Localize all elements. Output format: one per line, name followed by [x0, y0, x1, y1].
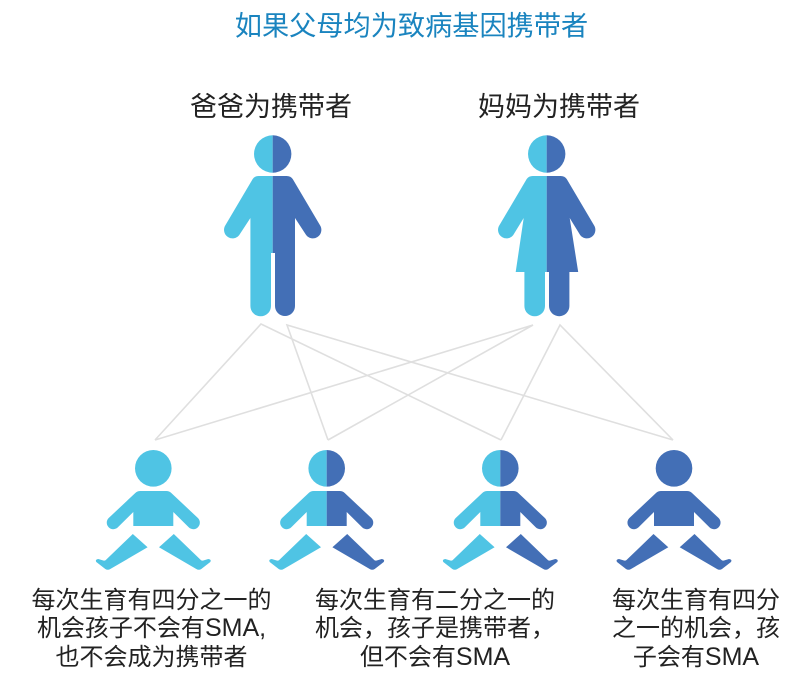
icon: child 4 affected all dark	[617, 450, 731, 570]
caption: children 2 and 3: 但不会有SMA	[360, 643, 510, 671]
caption: child 4: 每次生育有四分	[612, 587, 780, 614]
caption: child 1: 每次生育有四分之一的	[32, 587, 272, 614]
caption: child 4: 之一的机会，孩	[612, 615, 780, 642]
caption: child 1: 机会孩子不会有SMA,	[37, 614, 266, 642]
caption: child 1: 也不会成为携带者	[56, 644, 248, 671]
caption: children 2 and 3	[315, 587, 555, 671]
icon: child 3 carrier half light half dark	[443, 450, 558, 570]
icon: child 2 carrier half light half dark	[269, 450, 384, 570]
icon: child 1 unaffected all light	[96, 450, 211, 570]
caption: children 2 and 3: 机会，孩子是携带者，	[315, 615, 555, 642]
title: 如果父母均为致病基因携带者	[235, 10, 588, 41]
caption: child 1	[32, 587, 272, 671]
caption: child 4: 子会有SMA	[633, 643, 759, 671]
label: father carrier: 爸爸为携带者	[190, 92, 352, 122]
caption: children 2 and 3: 每次生育有二分之一的	[315, 587, 555, 614]
icon: father figure half light half dark	[224, 135, 321, 316]
inheritance connector lines	[155, 324, 673, 440]
label: mother carrier: 妈妈为携带者	[478, 92, 640, 122]
caption: child 4	[612, 587, 780, 671]
icon: mother figure half light half dark	[498, 135, 595, 316]
